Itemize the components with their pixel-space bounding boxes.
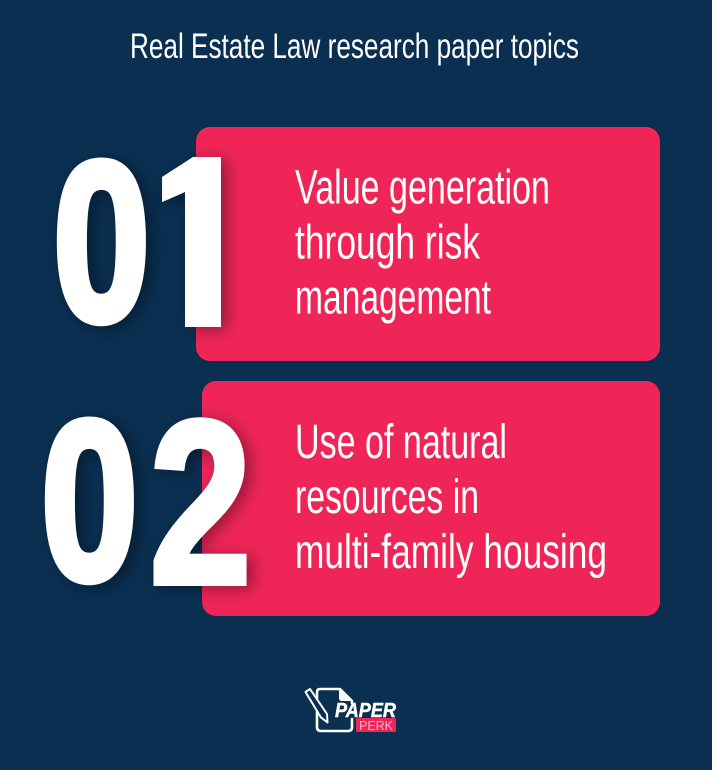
icon: page — [317, 689, 352, 731]
number 02: 0 — [41, 375, 138, 628]
wordmark: PERK: PERK — [359, 718, 393, 733]
number 02 — [41, 373, 252, 633]
number 01: 1 — [144, 105, 254, 379]
wordmark: PAPER: PAPER — [335, 700, 397, 722]
card 01 text: Value generation — [295, 162, 550, 214]
number 02: 2 — [150, 373, 252, 633]
wordmark: PERK badge — [356, 718, 396, 732]
card 01 text: through risk — [295, 216, 481, 270]
card 01 background — [196, 127, 660, 361]
card 02 text: Use of natural — [295, 416, 507, 469]
card 02 background — [202, 381, 660, 616]
card 02 text: resources in — [295, 471, 479, 524]
logo: Paper Perk — [306, 689, 397, 733]
panel: topic 02 — [41, 373, 660, 633]
card 01 text — [295, 162, 550, 324]
icon: page fold — [339, 689, 352, 701]
icon: pencil — [306, 689, 328, 722]
card 01 text: management — [295, 272, 491, 324]
card 02 text: multi-family housing — [295, 526, 607, 579]
number 01 — [56, 150, 237, 340]
number 01: 0 — [53, 116, 150, 369]
card 02 text — [295, 416, 607, 579]
panel: topic 01 — [56, 127, 660, 361]
